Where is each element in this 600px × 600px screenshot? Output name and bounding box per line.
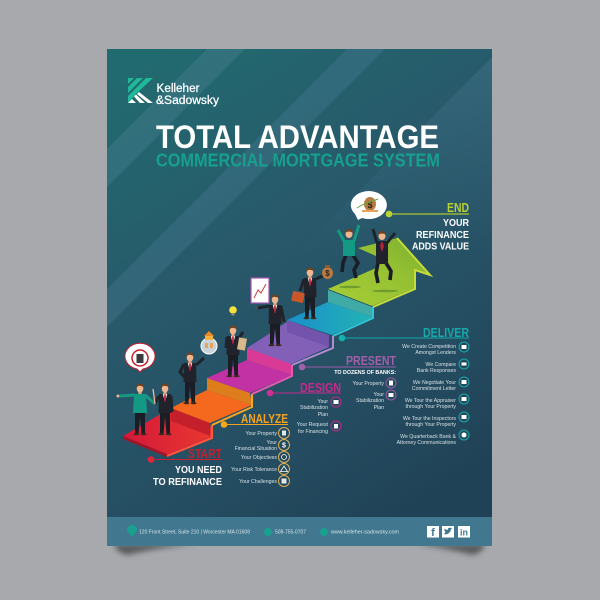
icon: briefcase [291, 291, 305, 303]
list: analyze items: Your [267, 440, 277, 446]
icon: money bag [322, 265, 333, 279]
person: analyze [180, 352, 204, 404]
riser: red [171, 408, 210, 436]
phone number: 508-755-0707 [275, 530, 306, 536]
list: deliver items: through Your Property [406, 422, 456, 428]
subtitle: COMMERCIAL MORTGAGE SYSTEM [156, 150, 440, 170]
riser: orange [207, 378, 252, 405]
list: present items: Your Property [352, 381, 384, 387]
list: analyze items: Your Objectives [241, 455, 277, 461]
list: deliver items: We Tour the Inspectors [403, 416, 456, 422]
text: you need to refinance: YOU NEED [175, 465, 222, 476]
heading: design: DESIGN [300, 381, 341, 395]
list: design items: Stabilization [300, 405, 328, 411]
heading: analyze: ANALYZE [241, 412, 288, 426]
heading: deliver: DELIVER [423, 326, 469, 340]
text: your refinance adds value: ADDS VALUE [412, 242, 469, 252]
icon: phone [264, 528, 272, 536]
list: analyze items: Financial Situation [235, 446, 277, 452]
step: present purple [247, 322, 329, 364]
icon: lightbulb [229, 306, 237, 316]
list: deliver items: Commitment Letter [412, 386, 456, 392]
staircase [123, 238, 430, 457]
connector: deliver [339, 335, 469, 341]
footer band [107, 517, 492, 546]
heading: end: END [447, 201, 469, 215]
icon: speech bubble with money: $ [367, 200, 373, 210]
list: deliver items: We Negotiate Your [413, 380, 456, 386]
address: 120 Front Street, Suite 210 | Worcester MA 01608 [139, 530, 250, 536]
section: analyze [221, 412, 290, 486]
list: design items [297, 397, 341, 435]
list: deliver items: We Create Competition [402, 344, 456, 350]
title: TOTAL ADVANTAGE [156, 119, 439, 155]
logo wordmark [156, 83, 219, 107]
text: your refinance adds value: YOUR [443, 218, 470, 229]
list: analyze items: Your Challenges [239, 479, 277, 485]
connector: analyze [221, 421, 288, 428]
list: design items: Plan [318, 412, 328, 418]
footer [107, 517, 492, 546]
logo wordmark: &Sadowsky [156, 95, 219, 107]
section: present [299, 354, 396, 411]
icon: twitter [442, 526, 454, 538]
list: analyze items: Your Risk Tolerance [231, 467, 277, 473]
poster shadow [114, 544, 485, 555]
list: deliver items [397, 342, 469, 446]
text: you need to refinance: TO REFINANCE [153, 477, 222, 488]
subheading: to dozens of banks: TO DOZENS OF BANKS: [334, 370, 396, 376]
stair edge trim [167, 238, 430, 456]
section: start [148, 447, 222, 488]
person: jumping green shirt [338, 225, 359, 278]
logo wordmark: Kelleher [156, 83, 200, 95]
list: deliver items: We Quarterback Bank & [400, 434, 457, 440]
icon: linkedin [458, 526, 470, 538]
list: present items [352, 378, 396, 411]
connector: start [148, 456, 222, 463]
heading: present: PRESENT [346, 354, 396, 368]
icon: speech bubble with building [125, 343, 155, 372]
text: your refinance adds value [412, 218, 470, 252]
connector: design [267, 390, 341, 396]
icon: facebook: f [431, 527, 435, 539]
step: deliver blue [287, 302, 373, 335]
list: present items: Plan [374, 405, 384, 411]
section: design [267, 381, 341, 435]
list: design items: for Financing [298, 429, 328, 435]
icon: chart board [251, 278, 269, 309]
icon: bank in coin [201, 331, 217, 354]
riser: teal [328, 290, 373, 317]
website: www.kelleher-sadowsky.com [331, 530, 399, 536]
list: design items: Your Request [297, 422, 329, 428]
step: end green arrow [328, 238, 430, 306]
riser: magenta [247, 348, 292, 375]
person: design with clipboard [226, 326, 247, 377]
list: deliver items: We Tour the Appraiser [405, 398, 456, 404]
section: deliver [339, 326, 469, 446]
connector: present [299, 364, 396, 370]
icon: money bag: $ [325, 269, 330, 278]
icon: globe [320, 528, 328, 536]
heading: start: START [188, 447, 222, 461]
list: present items: Your [374, 392, 384, 398]
icon: linkedin: in [460, 528, 468, 538]
list: analyze items: Your Property [245, 431, 277, 437]
list: deliver items: Bank Responses [417, 368, 456, 374]
icon: pin [127, 525, 137, 537]
person: present with chart [258, 294, 284, 346]
list: deliver items: Attorney Communications [397, 440, 456, 446]
logo [128, 78, 219, 107]
list: deliver items: We Compare [426, 362, 456, 368]
step: analyze orange [171, 390, 252, 423]
list: deliver items: through Your Property [406, 404, 456, 410]
list: analyze items: $ [282, 442, 286, 450]
step: design magenta [207, 360, 292, 393]
connector: end [386, 211, 469, 217]
riser: purple [287, 320, 329, 347]
text: your refinance adds value: REFINANCE [416, 230, 469, 241]
step: start red [123, 436, 167, 457]
list: deliver items: Amongst Lenders [415, 350, 456, 356]
logo mark [128, 78, 153, 103]
poster background [107, 49, 492, 546]
list: design items: Your [318, 399, 328, 405]
text: you need to refinance [153, 465, 222, 488]
jump shadows [339, 286, 398, 292]
list: analyze items [231, 428, 290, 486]
person: suited man at start [153, 384, 172, 435]
person: jumping suit [373, 229, 395, 283]
icon: speech bubble with money [351, 191, 387, 220]
icon: facebook [427, 526, 439, 539]
list: present items: Stabilization [356, 398, 384, 404]
person: deliver walking [300, 268, 325, 319]
person: green shirt adviser [116, 384, 155, 435]
section: end [386, 201, 470, 252]
